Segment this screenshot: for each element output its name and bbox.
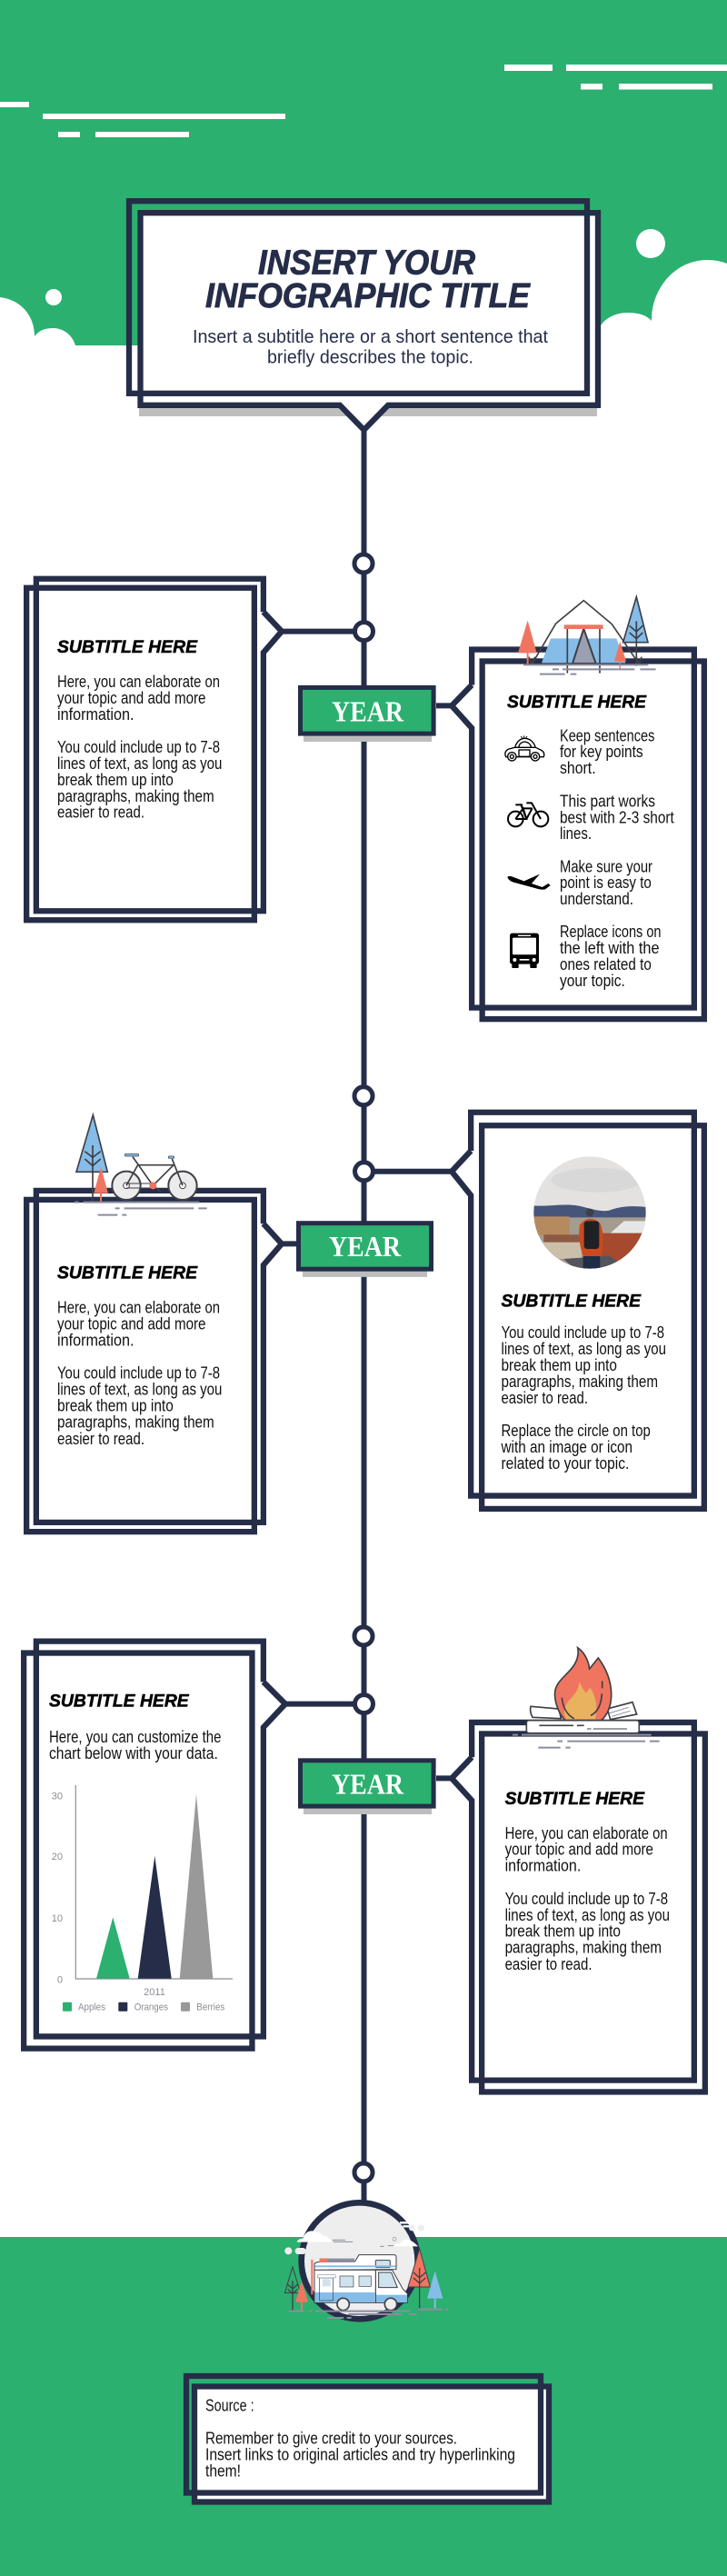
heading: SUBTITLE HERE xyxy=(505,1790,645,1809)
section 1 year tag xyxy=(300,687,433,742)
section 3 left card xyxy=(24,1642,373,2049)
body text: You could include up to 7-8 xyxy=(57,738,220,756)
source text xyxy=(205,2396,515,2481)
heading: SUBTITLE HERE xyxy=(57,638,198,657)
list text: Keep sentences xyxy=(560,726,654,744)
body text: easier to read. xyxy=(505,1955,593,1973)
body text: related to your topic. xyxy=(502,1454,629,1473)
body text: Replace the circle on top xyxy=(502,1422,651,1440)
body text: break them up into xyxy=(57,771,174,789)
body text: your topic and add more xyxy=(505,1841,653,1859)
triangle bar chart: 20 xyxy=(52,1852,63,1862)
body text: information. xyxy=(505,1857,581,1875)
chart legend: Oranges xyxy=(134,2002,168,2013)
section 2 year tag xyxy=(298,1223,431,1277)
body text xyxy=(501,1323,666,1473)
body text: Here, you can customize the xyxy=(49,1728,221,1746)
timeline nodes xyxy=(354,554,373,2182)
body text: lines of text, as long as you xyxy=(505,1906,670,1924)
title subtitle text: briefly describes the topic. xyxy=(267,347,473,367)
connector xyxy=(282,629,356,634)
source text: Insert links to original articles and try hyperlinking xyxy=(205,2446,515,2464)
body text: Here, you can elaborate on xyxy=(505,1824,668,1842)
body text: paragraphs, making them xyxy=(505,1939,662,1957)
bottom green footer band xyxy=(0,2237,727,2576)
top green header band xyxy=(0,0,727,364)
body text: information. xyxy=(57,705,134,724)
illustration: bicycle and trees xyxy=(75,1115,207,1215)
heading: SUBTITLE HERE xyxy=(49,1692,190,1711)
illustration: campfire xyxy=(513,1648,660,1748)
body text xyxy=(57,1298,222,1448)
body text: information. xyxy=(57,1332,134,1350)
title panel xyxy=(129,201,598,430)
source text: them! xyxy=(205,2462,241,2481)
icon: police car xyxy=(505,735,544,761)
body text: easier to read. xyxy=(57,1430,144,1448)
photo circle xyxy=(533,1156,646,1269)
connector xyxy=(285,1702,356,1707)
body text: Here, you can elaborate on xyxy=(57,1298,220,1316)
section 3 year tag: YEAR xyxy=(332,1768,404,1801)
connector xyxy=(356,1169,452,1174)
source panel xyxy=(186,2376,549,2501)
connector xyxy=(436,1775,452,1781)
body text xyxy=(505,1824,670,1973)
body text: lines of text, as long as you xyxy=(502,1340,666,1358)
chart legend xyxy=(63,2002,225,2013)
section 2 year tag: YEAR xyxy=(329,1230,402,1263)
icon: bicycle xyxy=(508,803,548,826)
illustration: camper van medallion xyxy=(284,2202,448,2319)
section 1 right card xyxy=(436,597,704,1019)
list text: This part works xyxy=(560,793,655,811)
section 3 right card xyxy=(436,1648,705,2092)
list text: best with 2-3 short xyxy=(560,808,674,826)
icon: bus xyxy=(510,934,539,968)
list text xyxy=(560,726,674,990)
list text: Make sure your xyxy=(560,857,652,875)
timeline spine xyxy=(362,427,367,2209)
body text: chart below with your data. xyxy=(49,1744,218,1762)
connector xyxy=(436,703,452,708)
title text xyxy=(205,244,532,315)
icon: airplane xyxy=(507,874,551,890)
triangle bar chart xyxy=(52,1785,233,2013)
body text: lines of text, as long as you xyxy=(57,754,222,773)
triangle bar chart: 0 xyxy=(57,1975,63,1986)
body text: paragraphs, making them xyxy=(57,787,214,805)
list text: point is easy to xyxy=(560,874,652,892)
body text: break them up into xyxy=(502,1356,617,1374)
list text: short. xyxy=(560,759,596,777)
heading: SUBTITLE HERE xyxy=(507,694,647,713)
triangle bar chart: 30 xyxy=(52,1791,63,1802)
body text: break them up into xyxy=(505,1922,621,1941)
body text: break them up into xyxy=(57,1397,174,1415)
body text: paragraphs, making them xyxy=(502,1373,658,1391)
list text: Replace icons on xyxy=(560,923,662,941)
body text: paragraphs, making them xyxy=(57,1413,214,1431)
section 1 year tag: YEAR xyxy=(332,695,404,728)
body text xyxy=(57,673,222,822)
heading: SUBTITLE HERE xyxy=(502,1293,642,1312)
list text: your topic. xyxy=(560,972,625,990)
body text: lines of text, as long as you xyxy=(57,1381,222,1399)
chart legend: Berries xyxy=(196,2002,225,2013)
list text: the left with the xyxy=(560,939,660,957)
illustration: tent and trees xyxy=(518,597,656,674)
list text: ones related to xyxy=(560,955,652,973)
heading: SUBTITLE HERE xyxy=(57,1264,198,1283)
list text: understand. xyxy=(560,890,633,908)
source text: Remember to give credit to your sources. xyxy=(205,2429,457,2447)
title subtitle text: Insert a subtitle here or a short sentence that xyxy=(193,327,548,347)
title text: INFOGRAPHIC TITLE xyxy=(205,277,532,315)
body text: Here, you can elaborate on xyxy=(57,673,220,691)
body text: You could include up to 7-8 xyxy=(505,1890,668,1908)
body text: with an image or icon xyxy=(501,1438,632,1456)
list text: lines. xyxy=(560,824,592,843)
section 1 left card xyxy=(26,579,373,920)
source text: Source : xyxy=(205,2396,254,2414)
triangle bar chart: 2011 xyxy=(144,1987,165,1998)
chart legend: Apples xyxy=(78,2002,105,2013)
title subtitle text xyxy=(193,327,548,367)
body text: your topic and add more xyxy=(57,1314,205,1333)
body text: easier to read. xyxy=(502,1389,588,1407)
body text: your topic and add more xyxy=(57,689,205,707)
list text: for key points xyxy=(560,743,643,761)
section 2 right card xyxy=(354,1113,704,1509)
body text: You could include up to 7-8 xyxy=(57,1363,220,1382)
body text: You could include up to 7-8 xyxy=(502,1323,664,1342)
section 3 year tag xyxy=(300,1761,433,1814)
section 2 left card xyxy=(26,1115,298,1532)
body text: easier to read. xyxy=(57,804,144,822)
title text: INSERT YOUR xyxy=(258,244,476,282)
triangle bar chart: 10 xyxy=(52,1913,63,1924)
body text xyxy=(49,1728,221,1762)
connector xyxy=(282,1241,298,1246)
